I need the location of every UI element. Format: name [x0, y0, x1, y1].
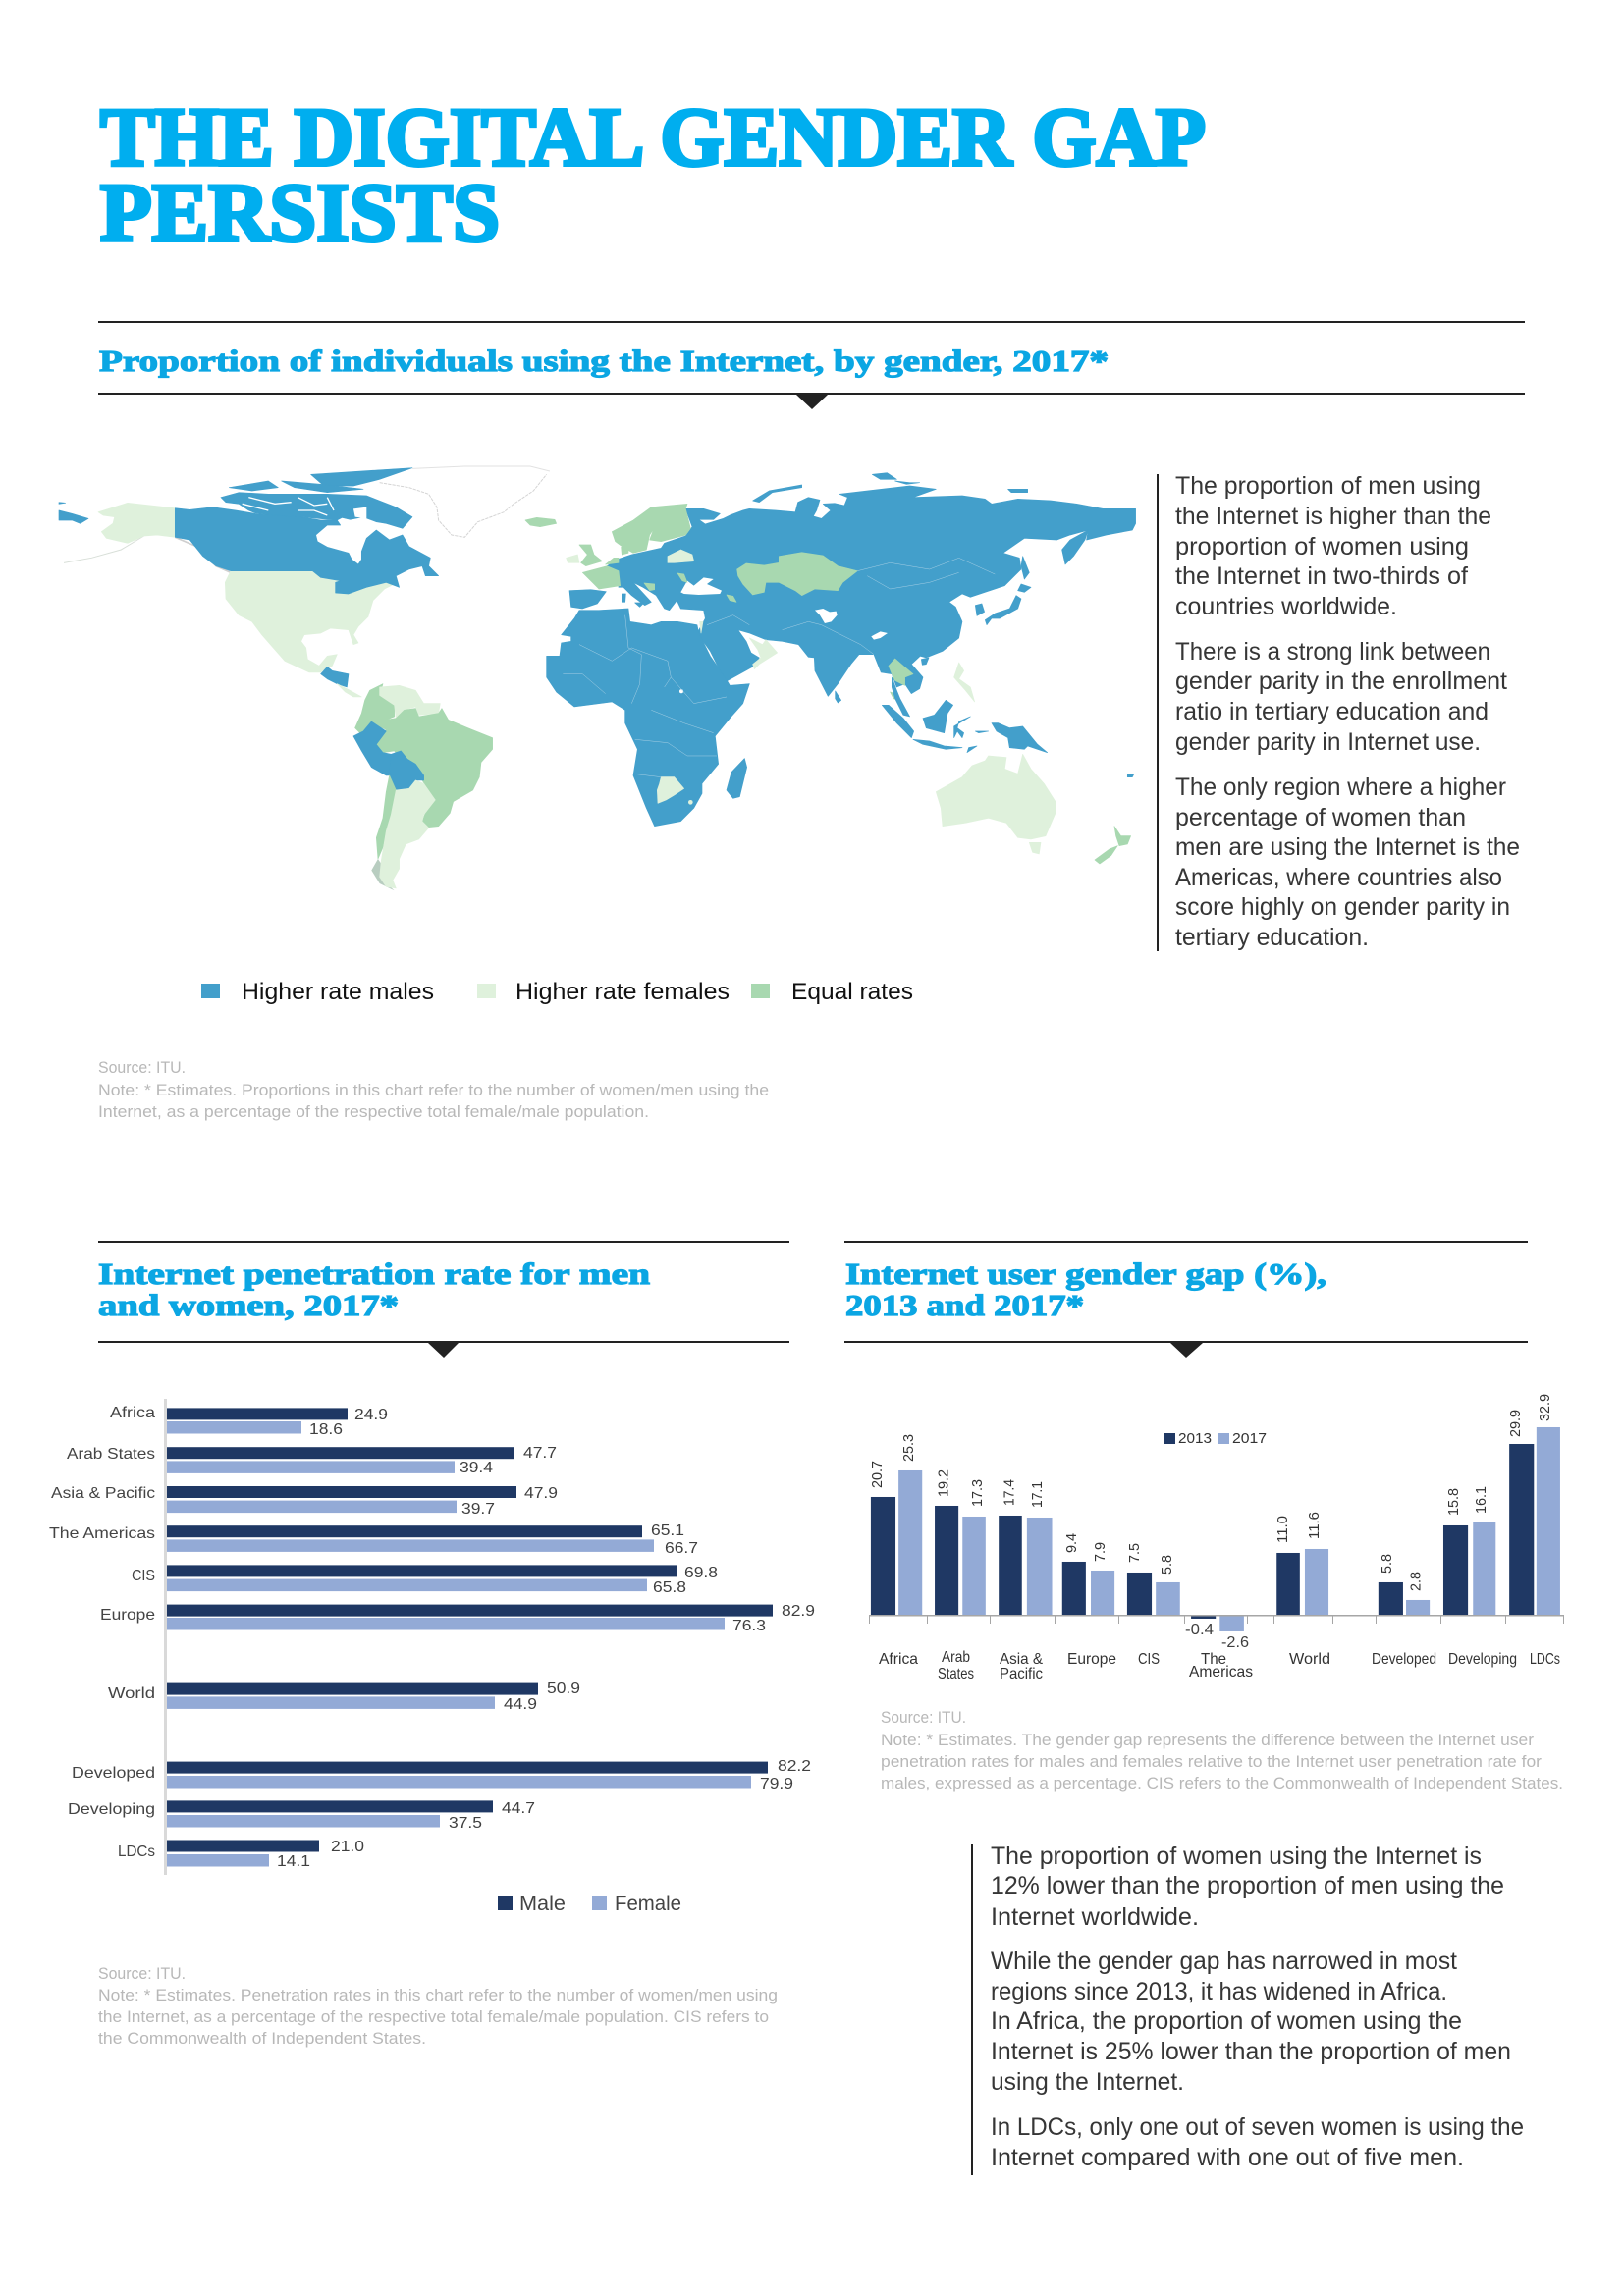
text block: gender gap commentary: The proportion of women using the Internet is: [991, 1842, 1482, 1870]
chart legend: 2017: [1232, 1430, 1267, 1447]
column chart: gender gap 2013 and 2017: [869, 1394, 1564, 1682]
title: PERSISTS: [100, 167, 500, 259]
text block: gender gap commentary: regions since 2013, it has widened in Africa.: [991, 1978, 1447, 2005]
rotated value labels: 11.6: [1306, 1512, 1323, 1539]
text block: map commentary: ratio in tertiary education and: [1175, 698, 1489, 725]
rotated value labels: 5.8: [1159, 1555, 1175, 1575]
value labels: 21.0: [331, 1839, 364, 1855]
chart legend: 2013: [1178, 1430, 1212, 1447]
text block: map commentary: tertiary education.: [1175, 924, 1369, 951]
value labels: 44.9: [504, 1696, 537, 1713]
title: [100, 91, 1206, 259]
text block: map commentary: The proportion of men using: [1175, 472, 1481, 500]
text block: gender gap commentary: In LDCs, only one out of seven women is using the: [991, 2113, 1524, 2141]
source note: penetration chart: [98, 1964, 778, 2048]
text block: gender gap commentary: Internet worldwide.: [991, 1903, 1199, 1931]
source note: gender gap chart: penetration rates for males and females relative to the Internet user penetration rate for: [881, 1752, 1542, 1771]
map legend: Equal rates: [791, 979, 913, 1005]
chart legend: [498, 1893, 681, 1915]
heading: Internet user gender gap: Internet user gender gap (%),: [845, 1256, 1326, 1291]
category labels: CIS: [1138, 1651, 1160, 1668]
value labels: 65.8: [653, 1579, 686, 1596]
text block: map commentary: There is a strong link between: [1175, 638, 1490, 666]
map: Americas: [59, 466, 550, 890]
category labels: Developed: [1372, 1651, 1436, 1668]
rotated value labels: 15.8: [1445, 1488, 1462, 1516]
value labels: 47.9: [524, 1485, 558, 1502]
category labels: World: [108, 1685, 155, 1702]
value labels: 44.7: [502, 1800, 535, 1817]
rotated value labels: 20.7: [869, 1461, 886, 1488]
text block: gender gap commentary: [971, 1842, 1524, 2175]
category labels: CIS: [132, 1568, 155, 1584]
rotated value labels: -2.6: [1221, 1634, 1249, 1651]
source note: map: Note: * Estimates. Proportions in this chart refer to the number of women/men using the: [98, 1081, 769, 1099]
source note: gender gap chart: [881, 1708, 1563, 1792]
value labels: 79.9: [760, 1776, 793, 1792]
female bars: [167, 1421, 751, 1867]
chart legend: [1164, 1430, 1267, 1447]
category labels: Africa: [110, 1405, 155, 1421]
category labels: The Americas: [49, 1525, 155, 1542]
heading: Internet user gender gap: 2013 and 2017*: [845, 1288, 1084, 1322]
text block: gender gap commentary: Internet is 25% lower than the proportion of men: [991, 2038, 1511, 2065]
category labels: Developing: [1448, 1651, 1517, 1668]
title: THE DIGITAL GENDER GAP: [100, 91, 1206, 184]
value labels: 66.7: [665, 1540, 698, 1557]
category labels: Africa: [879, 1651, 918, 1668]
male bars: [167, 1408, 773, 1851]
category labels: Europe: [1067, 1651, 1116, 1668]
text block: gender gap commentary: Internet compared with one out of five men.: [991, 2144, 1464, 2171]
value labels: 39.4: [460, 1460, 493, 1476]
heading: Internet user gender gap: [844, 1241, 1528, 1358]
text block: map commentary: [1157, 472, 1520, 951]
value labels: 65.1: [651, 1522, 684, 1539]
heading: proportion of individuals using the Internet: Proportion of individuals using the Internet, by gender, 2017*: [99, 344, 1109, 378]
rotated value labels: [869, 1394, 1553, 1651]
rotated value labels: 16.1: [1473, 1486, 1489, 1514]
text block: map commentary: score highly on gender parity in: [1175, 893, 1510, 921]
columns 2013: [871, 1444, 1534, 1619]
source note: penetration chart: Note: * Estimates. Penetration rates in this chart refer to the number of women/men using: [98, 1986, 778, 2004]
source note: map: Source: ITU.: [98, 1058, 186, 1077]
value labels: 69.8: [684, 1565, 718, 1581]
rotated value labels: 17.4: [1001, 1479, 1017, 1506]
category labels: LDCs: [1530, 1651, 1560, 1668]
map legend: [201, 979, 913, 1005]
source note: gender gap chart: males, expressed as a percentage. CIS refers to the Commonwealth of Independent States.: [881, 1774, 1563, 1792]
text block: map commentary: Americas, where countries also: [1175, 864, 1502, 891]
rotated value labels: 19.2: [935, 1469, 952, 1497]
heading: Internet penetration rate: Internet penetration rate for men: [98, 1256, 650, 1291]
source note: penetration chart: Source: ITU.: [98, 1964, 186, 1983]
rotated value labels: 5.8: [1379, 1554, 1395, 1574]
text block: map commentary: percentage of women than: [1175, 804, 1466, 831]
category labels: Asia & Pacific: [51, 1485, 155, 1502]
text block: gender gap commentary: using the Internet.: [991, 2068, 1184, 2096]
category labels: States: [938, 1666, 974, 1682]
category labels: Developed: [72, 1765, 155, 1782]
rotated value labels: 17.3: [969, 1479, 986, 1507]
source note: gender gap chart: Note: * Estimates. The gender gap represents the difference between the Internet user: [881, 1731, 1534, 1749]
category labels: LDCs: [118, 1843, 155, 1860]
category labels: [879, 1649, 1560, 1682]
text block: gender gap commentary: In Africa, the proportion of women using the: [991, 2007, 1462, 2035]
heading: Internet penetration rate: and women, 2017*: [98, 1288, 399, 1322]
text block: gender gap commentary: 12% lower than the proportion of men using the: [991, 1872, 1504, 1899]
chart legend: Female: [615, 1893, 681, 1915]
value labels: 39.7: [461, 1501, 495, 1518]
rotated value labels: 25.3: [900, 1434, 917, 1462]
rotated value labels: -0.4: [1185, 1622, 1214, 1638]
rotated value labels: 11.0: [1274, 1516, 1291, 1543]
text block: map commentary: countries worldwide.: [1175, 593, 1397, 620]
category labels: Americas: [1189, 1664, 1253, 1681]
map: East Asia and Oceania: [836, 473, 1134, 864]
bar chart: penetration rate by gender: [49, 1399, 815, 1915]
source note: penetration chart: the Commonwealth of Independent States.: [98, 2029, 426, 2048]
map legend: Higher rate females: [515, 979, 730, 1005]
text block: map commentary: The only region where a higher: [1175, 774, 1506, 801]
source note: map: [98, 1058, 769, 1121]
rotated value labels: 17.1: [1029, 1481, 1046, 1508]
rotated value labels: 32.9: [1537, 1394, 1553, 1421]
value labels: 37.5: [449, 1815, 482, 1832]
source note: gender gap chart: Source: ITU.: [881, 1708, 966, 1727]
category labels: Asia &: [1000, 1651, 1043, 1668]
map: Europe, Africa and Asia: [525, 485, 1136, 827]
chart legend: Male: [519, 1893, 566, 1915]
value labels: [277, 1407, 815, 1870]
value labels: 14.1: [277, 1853, 310, 1870]
value labels: 82.9: [782, 1603, 815, 1620]
rotated value labels: 7.9: [1092, 1542, 1109, 1562]
value labels: 50.9: [547, 1681, 580, 1697]
map legend: Higher rate males: [242, 979, 434, 1005]
category labels: Developing: [68, 1801, 155, 1818]
rotated value labels: 7.5: [1126, 1543, 1143, 1563]
heading: Internet penetration rate: [98, 1241, 789, 1358]
value labels: 18.6: [309, 1421, 343, 1438]
category labels: Arab States: [67, 1446, 155, 1463]
rotated value labels: 2.8: [1408, 1572, 1424, 1591]
columns 2017: [898, 1427, 1560, 1631]
source note: penetration chart: the Internet, as a percentage of the respective total female/male population. CIS refers to: [98, 2007, 769, 2026]
category labels: [49, 1405, 155, 1860]
rotated value labels: 29.9: [1507, 1410, 1524, 1437]
heading: proportion of individuals using the Internet: [98, 321, 1525, 409]
text block: map commentary: gender parity in the enrollment: [1175, 667, 1507, 695]
text block: map commentary: the Internet is higher than the: [1175, 503, 1491, 530]
world map: [59, 466, 1136, 890]
category labels: The: [1201, 1651, 1226, 1668]
category labels: World: [1289, 1651, 1330, 1668]
source note: map: Internet, as a percentage of the respective total female/male population.: [98, 1102, 649, 1121]
axis with ticks: [869, 1615, 1564, 1624]
category labels: Pacific: [1000, 1666, 1043, 1682]
category labels: Europe: [100, 1607, 155, 1624]
value labels: 24.9: [354, 1407, 388, 1423]
text block: map commentary: gender parity in Internet use.: [1175, 728, 1481, 756]
text block: map commentary: men are using the Internet is the: [1175, 833, 1520, 861]
rotated value labels: 9.4: [1063, 1533, 1080, 1553]
text block: gender gap commentary: While the gender gap has narrowed in most: [991, 1948, 1457, 1975]
value labels: 47.7: [523, 1445, 557, 1462]
value labels: 82.2: [778, 1758, 811, 1775]
text block: map commentary: the Internet in two-thirds of: [1175, 562, 1468, 590]
category labels: Arab: [942, 1649, 970, 1666]
text block: map commentary: proportion of women using: [1175, 533, 1469, 561]
value labels: 76.3: [732, 1618, 766, 1634]
